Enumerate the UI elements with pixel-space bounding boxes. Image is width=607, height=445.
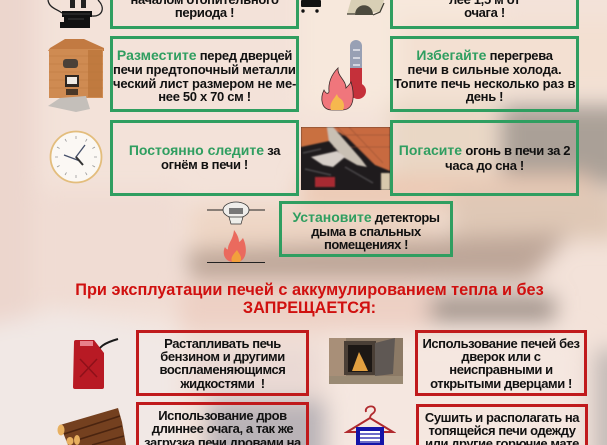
panel: avoid overheating: Топите печь несколько раз в (394, 76, 575, 90)
panel: no gasoline: воспламеняющимся (160, 362, 285, 377)
panel: no door (415, 330, 587, 396)
panel: avoid overheating: печи в сильные холода. (407, 62, 562, 77)
icon: red fuel canister (73, 338, 118, 389)
panel: watch the fire: огнём в печи ! (161, 157, 248, 172)
icon: hanger with clothes (344, 406, 396, 445)
panel: watch the fire (110, 120, 299, 196)
heading: prohibitions (75, 281, 544, 317)
panel: avoid overheating: Избегайте перегрева (416, 47, 553, 63)
heading: prohibitions: При эксплуатации печей с аккумулированием тепла и без (75, 281, 544, 299)
image: open stove door photo (329, 338, 403, 384)
icon: black stand (301, 0, 321, 13)
panel: avoid overheating (390, 36, 579, 112)
panel: long firewood: Использование дров (158, 408, 287, 422)
panel: long firewood (136, 402, 309, 445)
icon: small stove (347, 0, 384, 16)
panel: install smoke detectors (279, 201, 453, 257)
panel: place metal sheet: нее 50 х 70 см ! (158, 89, 251, 104)
panel: extinguish fire: часа до сна ! (445, 158, 524, 173)
icon: wall clock (50, 130, 102, 184)
icon: stack of firewood (58, 408, 126, 445)
icon: brick stove with metal sheet (48, 39, 104, 112)
panel: no gasoline: Растапливать печь (164, 336, 281, 350)
panel: no door: неисправными и (449, 362, 553, 377)
panel: avoid overheating: день ! (466, 89, 503, 104)
heading: prohibitions: ЗАПРЕЩАЕТСЯ: (243, 299, 376, 317)
panel: no drying clothes: топящейся печи одежду (428, 423, 576, 438)
panel: top right advice (390, 0, 579, 29)
panel: top right advice: очага ! (464, 5, 505, 20)
panel: place metal sheet: ческий лист размером не ме- (113, 76, 296, 90)
panel: no door: дверок или с (461, 349, 541, 364)
panel: install smoke detectors: дыма в спальных (311, 224, 421, 238)
panel: extinguish fire (390, 120, 579, 196)
icon: smoke detector and flame (207, 202, 265, 263)
panel: no gasoline: жидкостями ! (180, 376, 265, 391)
panel: place metal sheet (110, 36, 299, 112)
panel: place metal sheet: Разместите перед дверцей (117, 47, 292, 63)
panel: no drying clothes: Сушить и располагать на (425, 410, 579, 424)
panel: install smoke detectors: Установите детекторы (292, 208, 440, 224)
panel: no gasoline (136, 330, 309, 396)
panel: no drying clothes (416, 404, 588, 445)
panel: top left advice (110, 0, 299, 29)
panel: top left advice: периода ! (175, 5, 234, 20)
panel: watch the fire: Постоянно следите за (129, 142, 280, 158)
panel: no door: открытыми дверцами ! (430, 376, 572, 391)
panel: place metal sheet: печи предтопочный металли- (113, 62, 299, 77)
icon: thermometer and flame (321, 40, 366, 110)
panel: extinguish fire: Погасите огонь в печи за 2 (399, 142, 570, 158)
panel: install smoke detectors: помещениях ! (324, 236, 408, 252)
image: burnt room photo (301, 127, 390, 190)
panel: long firewood: длиннее очага, а так же (152, 421, 293, 436)
panel: no door: Использование печей без (422, 336, 580, 350)
icon: chimney with smoke (47, 0, 103, 28)
panel: no gasoline: бензином и другими (160, 349, 285, 364)
